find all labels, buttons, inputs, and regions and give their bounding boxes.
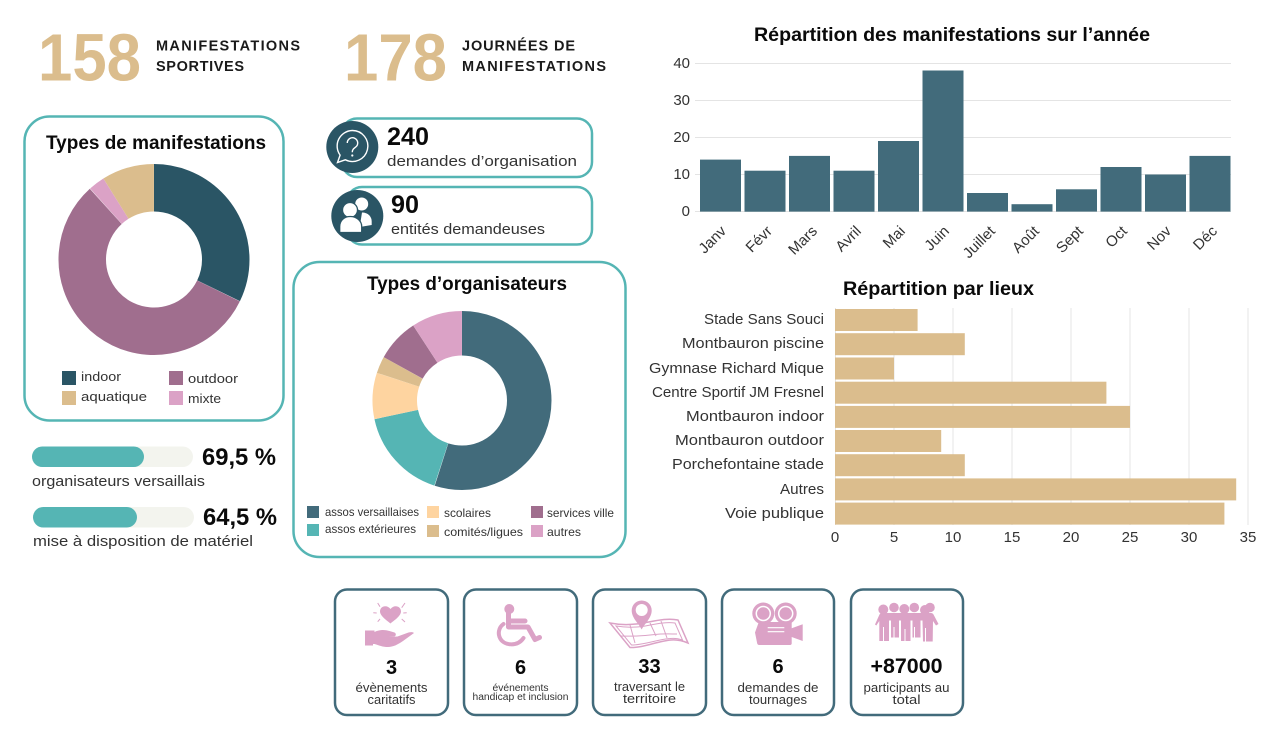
bar chart: répartition par lieux: Montbauron indoor	[686, 408, 824, 425]
bar chart: répartition par lieux: Stade Sans Souci	[704, 311, 824, 328]
card: participants au total: participants au	[864, 681, 950, 695]
progress: organisateurs versaillais: organisateurs versaillais	[32, 473, 205, 490]
bar chart: répartition par lieux: Centre Sportif JM Fresnel	[652, 384, 824, 401]
bar chart: manifestations par mois: Oct	[1102, 222, 1131, 251]
card: événements handicap et inclusion: 6	[515, 657, 526, 679]
icon: people	[331, 190, 383, 242]
bar chart: manifestations par mois	[673, 55, 1231, 262]
stat pill: 90 entités demandeuses: 90	[391, 191, 419, 219]
bar chart: manifestations par mois: 30	[673, 92, 690, 109]
donut chart: types de manifestations	[53, 158, 255, 361]
heading: types de manifestations: Types de manifestations	[46, 132, 266, 154]
card: évènements caritatifs: 3	[386, 657, 397, 679]
stat pill: 240 demandes d'organisation: demandes d’organisation	[387, 153, 577, 170]
bar chart: répartition par lieux: 15	[1004, 529, 1020, 546]
stat: 178 journées de manifestations: MANIFESTATIONS	[462, 59, 606, 75]
stat: 158 manifestations sportives: SPORTIVES	[156, 59, 244, 75]
progress: organisateurs versaillais	[32, 444, 276, 490]
card: participants au total	[851, 590, 963, 715]
card: demandes de tournages: tournages	[749, 693, 807, 707]
stat pill: 240 demandes d'organisation: 240	[387, 123, 429, 151]
icon: map pin	[610, 600, 688, 648]
card: événements handicap et inclusion: événements	[492, 683, 548, 694]
legend: types d'organisateurs: services ville	[547, 506, 614, 520]
bar chart: répartition par lieux: 10	[945, 529, 961, 546]
legend: types d'organisateurs: scolaires	[444, 506, 491, 520]
heading: répartition sur l'année: Répartition des manifestations sur l’année	[754, 24, 1150, 46]
bar chart: manifestations par mois: Nov	[1144, 222, 1175, 254]
card: traversant le territoire: traversant le	[614, 680, 685, 694]
card: événements handicap et inclusion: handicap et inclusion	[472, 692, 568, 703]
stat: 158 manifestations sportives: MANIFESTATIONS	[156, 38, 300, 54]
bar chart: manifestations par mois: Août	[1009, 222, 1043, 257]
icon: group of people	[875, 603, 938, 642]
card: demandes de tournages: 6	[772, 656, 784, 678]
bar chart: répartition par lieux: Gymnase Richard Mique	[649, 360, 824, 377]
card: traversant le territoire	[593, 590, 706, 715]
legend: types de manifestations: mixte	[188, 391, 221, 406]
legend: types d'organisateurs: assos extérieures	[325, 522, 416, 536]
bar chart: manifestations par mois: 20	[673, 129, 690, 146]
legend: types d'organisateurs: autres	[547, 525, 581, 539]
legend: types d'organisateurs	[307, 505, 614, 539]
stat: 158 manifestations sportives: 158	[38, 20, 141, 96]
legend: types de manifestations: aquatique	[81, 389, 147, 404]
icon: heart in hand	[365, 603, 414, 647]
bar chart: manifestations par mois: 40	[673, 55, 690, 72]
bar chart: répartition par lieux: Voie publique	[725, 505, 824, 522]
progress: organisateurs versaillais: 69,5 %	[202, 444, 276, 471]
stat pill: 90 entités demandeuses	[331, 187, 592, 244]
legend: types d'organisateurs: assos versaillaises	[325, 505, 419, 519]
stat: 178 journées de manifestations	[344, 20, 606, 96]
stat pill: 240 demandes d'organisation	[326, 118, 592, 177]
bar chart: répartition par lieux: 35	[1240, 529, 1256, 546]
bar chart: répartition par lieux: 20	[1063, 529, 1079, 546]
legend: types de manifestations	[62, 369, 239, 406]
bar chart: répartition par lieux	[649, 308, 1256, 546]
donut chart: types d'organisateurs	[369, 307, 555, 494]
stat: 178 journées de manifestations: 178	[344, 20, 447, 96]
card: traversant le territoire: territoire	[623, 692, 676, 706]
bar chart: répartition par lieux: Montbauron outdoor	[675, 432, 824, 449]
bar chart: manifestations par mois: 10	[673, 166, 690, 183]
bar chart: manifestations par mois: Juillet	[960, 222, 999, 262]
heading: répartition par lieux: Répartition par lieux	[843, 278, 1034, 300]
progress: mise à disposition de matériel: 64,5 %	[203, 504, 277, 531]
card: évènements caritatifs: évènements	[356, 681, 428, 695]
bar chart: manifestations par mois: Déc	[1190, 222, 1221, 254]
progress: mise à disposition de matériel	[33, 504, 277, 550]
bar chart: manifestations par mois: Févr	[743, 223, 776, 256]
heading: types d'organisateurs: Types d’organisateurs	[367, 273, 567, 295]
bar chart: manifestations par mois: 0	[682, 203, 690, 220]
card: traversant le territoire: 33	[638, 656, 661, 678]
bar chart: répartition par lieux: Porchefontaine stade	[672, 456, 824, 473]
stat: 158 manifestations sportives	[38, 20, 300, 96]
legend: types d'organisateurs: comités/ligues	[444, 525, 523, 539]
card: évènements caritatifs: caritatifs	[368, 693, 416, 707]
card: évènements caritatifs	[335, 590, 448, 715]
legend: types de manifestations: outdoor	[188, 371, 239, 386]
card: participants au total: total	[892, 693, 920, 707]
card: demandes de tournages	[722, 590, 834, 715]
card: demandes de tournages: demandes de	[738, 681, 819, 695]
bar chart: manifestations par mois: Avril	[832, 223, 865, 255]
panel: types de manifestations	[24, 116, 284, 420]
bar chart: manifestations par mois: Mai	[880, 223, 909, 252]
progress: mise à disposition de matériel: mise à disposition de matériel	[33, 533, 253, 550]
card: événements handicap et inclusion	[464, 590, 577, 715]
stat: 178 journées de manifestations: JOURNÉES DE	[462, 38, 575, 54]
panel: types d'organisateurs	[294, 262, 626, 557]
icon: question speech bubble	[326, 121, 378, 173]
bar chart: répartition par lieux: 30	[1181, 529, 1197, 546]
stat pill: 90 entités demandeuses: entités demandeuses	[391, 221, 545, 238]
bar chart: répartition par lieux: Montbauron piscine	[682, 335, 824, 352]
bar chart: manifestations par mois: Janv	[695, 222, 730, 257]
bar chart: répartition par lieux: Autres	[780, 481, 824, 498]
bar chart: répartition par lieux: 25	[1122, 529, 1138, 546]
icon: film camera	[752, 602, 803, 645]
bar chart: manifestations par mois: Juin	[921, 223, 953, 254]
bar chart: manifestations par mois: Sept	[1053, 222, 1087, 257]
bar chart: manifestations par mois: Mars	[785, 223, 821, 258]
icon: wheelchair	[499, 604, 540, 644]
bar chart: répartition par lieux: 5	[890, 529, 898, 546]
legend: types de manifestations: indoor	[81, 369, 122, 384]
bar chart: répartition par lieux: 0	[831, 529, 839, 546]
card: participants au total: +87000	[870, 655, 942, 678]
